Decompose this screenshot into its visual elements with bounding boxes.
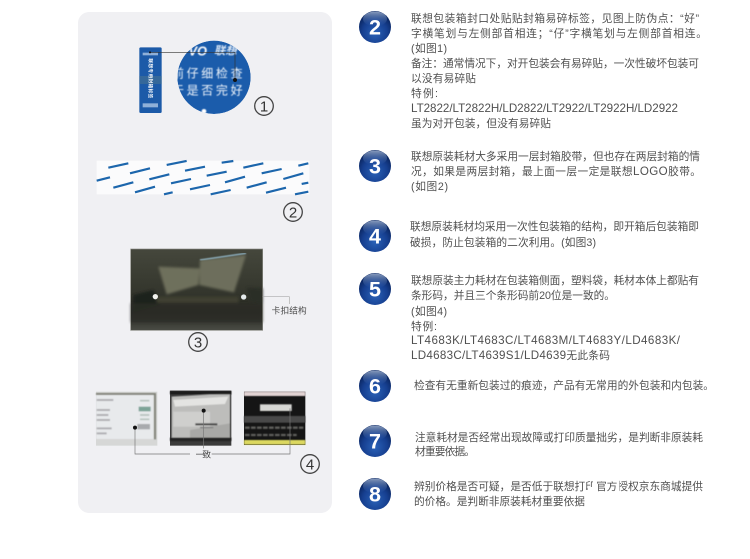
barcode photo B [170, 391, 231, 446]
number badge 2: 2 [289, 204, 297, 222]
connector line with label [133, 408, 290, 459]
connector line with label: 一致 [196, 448, 211, 459]
text 3: 况，如果是两层封箱，最上面一层一定是联想LOGO胶带。 [411, 165, 701, 178]
step 4 [359, 220, 699, 252]
callout line between label and circle [149, 51, 237, 82]
text 2: (如图1) [411, 42, 447, 55]
badge 5: 5 [369, 278, 381, 302]
badge 7 [359, 425, 391, 457]
magnified seal circle: VO [189, 44, 207, 58]
panel: image panel background [78, 12, 332, 513]
text 4: 破损，防止包装箱的二次利用。(如图3) [410, 236, 596, 249]
text 7 [415, 431, 703, 458]
text 5: 特例: [411, 320, 437, 333]
number badge 1: 1 [260, 98, 268, 116]
text 2: 联想包装箱封口处贴贴封箱易碎标签，见图上防伪点：“好” [411, 12, 699, 25]
badge 6 [359, 370, 391, 402]
tape logo dashes [97, 161, 308, 194]
text 5 [411, 274, 699, 362]
text 5: 条形码，并且三个条形码前20位是一致的。 [411, 289, 615, 302]
text 2: 虽为对开包装，但没有易碎贴 [411, 117, 551, 130]
badge 2: 2 [369, 16, 381, 40]
number badge 3 [189, 333, 207, 352]
seal label strip: 联想专用封箱标签 [147, 58, 154, 99]
figure 4: barcode photos [96, 391, 305, 459]
magnified seal circle [172, 41, 251, 114]
number badge 2 [284, 203, 302, 222]
number badge 3: 3 [194, 334, 202, 352]
text 5: 联想原装主力耗材在包装箱侧面，塑料袋，耗材本体上都贴有 [411, 274, 699, 287]
text 3 [411, 150, 701, 193]
number badge 4 [301, 455, 319, 474]
text 8 [414, 479, 703, 508]
badge 4: 4 [369, 224, 381, 248]
text 8: 的价格。是判断非原装耗材重要依据 [414, 495, 585, 508]
text 7: 材重要依据。 [415, 445, 475, 458]
text 3: 联想原装耗材大多采用一层封箱胶带，但也存在两层封箱的情 [411, 150, 700, 163]
text 2: 字横笔划与左侧部首相连；“仔”字横笔划与左侧部首相连。 [411, 27, 707, 40]
text 5: LT4683K/LT4683C/LT4683M/LT4683Y/LD4683K/ [411, 334, 681, 347]
text 5: LD4683C/LT4639S1/LD4639无此条码 [411, 349, 610, 362]
figure 3: snap structure photo [131, 249, 307, 330]
badge 5 [359, 273, 391, 305]
badge 3: 3 [369, 154, 381, 178]
text 2: 以没有易碎贴 [411, 72, 476, 85]
text 7: 注意耗材是否经常出现故障或打印质量拙劣，是判断非原装耗 [415, 431, 703, 444]
text 3: (如图2) [411, 180, 448, 193]
text 4: 联想原装耗材均采用一次性包装箱的结构，即开箱后包装箱即 [410, 220, 699, 233]
badge 8 [359, 478, 391, 510]
badge 8: 8 [369, 482, 381, 506]
text 2: 特例: [411, 87, 438, 100]
text 2 [411, 12, 707, 130]
step 2 [359, 11, 707, 130]
figure 2: Lenovo logo tape [97, 161, 309, 194]
step 3 [359, 150, 701, 193]
snap structure callout [263, 297, 307, 316]
number badge 1 [255, 97, 273, 116]
badge 4 [359, 220, 391, 252]
dark box photo [131, 249, 263, 330]
magnified seal circle: 于是否完好 [172, 82, 245, 97]
text 8: 辨别价格是否可疑，是否低于联想打印官方授权京东商城提供 [414, 480, 703, 493]
text 4 [410, 220, 699, 249]
text 6: 检查有无重新包装过的痕迹，产品有无常用的外包装和内包装。 [414, 379, 714, 392]
barcode photo A [96, 392, 157, 446]
step 8 [359, 478, 703, 510]
badge 3 [359, 150, 391, 182]
text 5: (如图4) [411, 305, 447, 318]
step 5 [359, 273, 699, 362]
barcode photo C [244, 392, 305, 445]
magnified seal circle: 前仔细检查 [172, 65, 245, 80]
figure 1: security seal label [139, 41, 251, 114]
snap structure callout: 卡扣结构 [272, 305, 307, 316]
step 6 [359, 370, 714, 402]
badge 7: 7 [369, 430, 381, 454]
magnified seal circle: 联想 [214, 45, 238, 58]
text 2: LT2822/LT2822H/LD2822/LT2922/LT2922H/LD2922 [411, 102, 678, 115]
badge 6: 6 [369, 374, 381, 398]
text 2: 备注：通常情况下，对开包装会有易碎贴，一次性破坏包装可 [411, 57, 699, 70]
badge 2 [359, 11, 391, 43]
step 7 [359, 425, 703, 458]
number badge 4: 4 [306, 456, 314, 474]
